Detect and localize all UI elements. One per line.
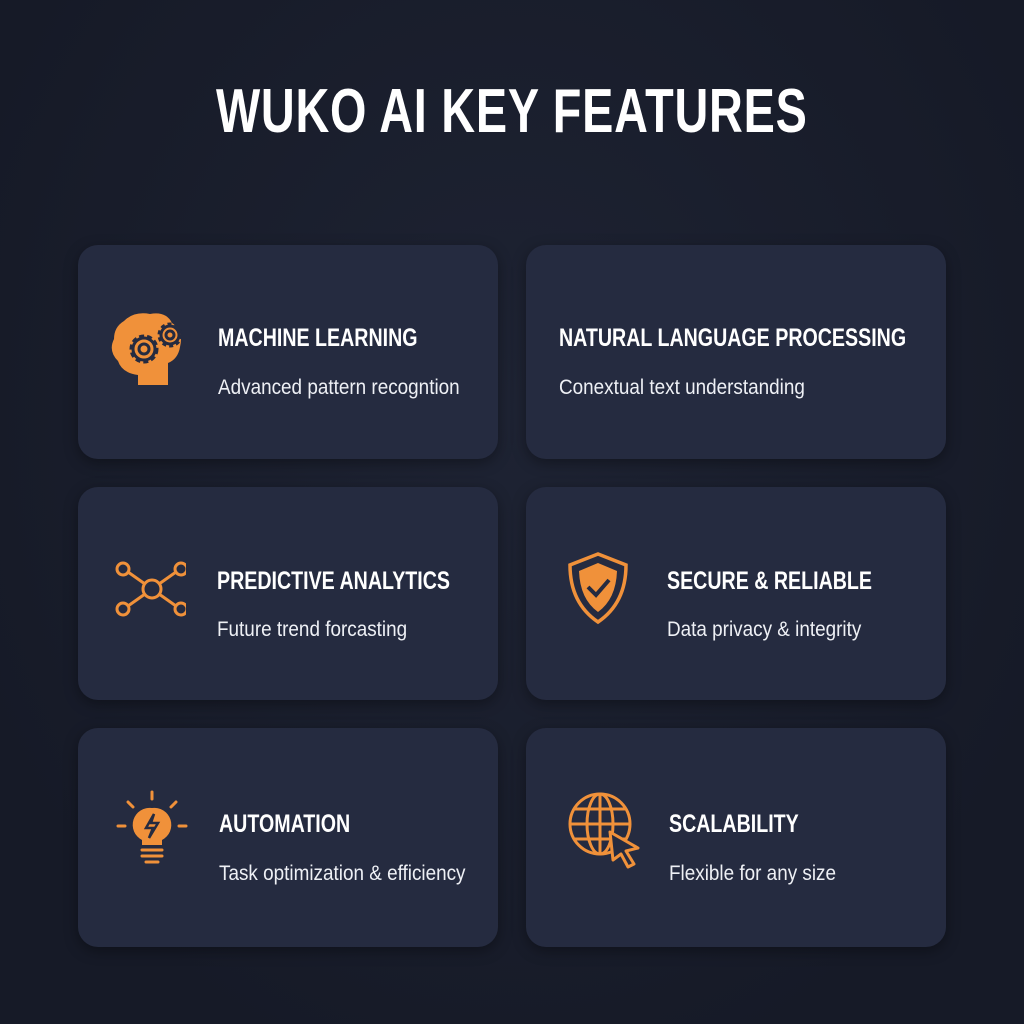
panel: secure <box>526 487 946 700</box>
heading: MACHINE LEARNING <box>218 324 418 352</box>
panel: nlp <box>526 245 946 459</box>
panel: automation <box>78 728 498 947</box>
panel: scalability <box>526 728 946 947</box>
panel: machine learning <box>78 245 498 459</box>
heading: NATURAL LANGUAGE PROCESSING <box>559 324 906 352</box>
subtitle: Advanced pattern recogntion <box>218 376 460 399</box>
subtitle: Data privacy & integrity <box>667 618 861 641</box>
icon: shield <box>568 552 628 624</box>
icon: network <box>116 562 186 616</box>
subtitle: Future trend forcasting <box>217 618 407 641</box>
heading: PREDICTIVE ANALYTICS <box>217 567 450 595</box>
heading: AUTOMATION <box>219 810 350 838</box>
icon: brain gears <box>112 313 181 385</box>
icon: lightbulb <box>116 790 188 864</box>
subtitle: Flexible for any size <box>669 862 836 885</box>
heading: SECURE & RELIABLE <box>667 567 872 595</box>
title: WUKO AI KEY FEATURES <box>216 77 808 146</box>
subtitle: Task optimization & efficiency <box>219 862 466 885</box>
subtitle: Conextual text understanding <box>559 376 805 399</box>
panel: predictive analytics <box>78 487 498 700</box>
heading: SCALABILITY <box>669 810 799 838</box>
icon: globe cursor <box>568 792 640 868</box>
